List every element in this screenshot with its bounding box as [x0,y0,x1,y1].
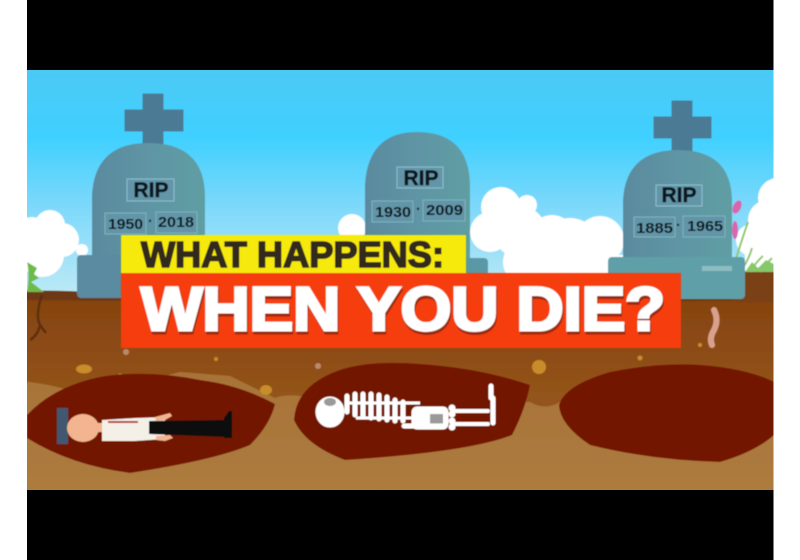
shirt [102,417,165,441]
hat [57,408,68,444]
years: 1930 [375,205,411,221]
clouds [27,178,774,278]
heading: when you die: WHEN YOU DIE? [141,275,665,343]
year plates [105,212,197,234]
sky [20,65,780,305]
title banner [121,234,681,348]
tombstone 3 [608,101,745,299]
year plates [634,216,725,237]
scene illustration [14,65,798,495]
worm [711,310,716,345]
year plates [372,200,465,222]
pit 3 empty [559,364,774,462]
cross [125,94,183,148]
yellow banner [121,235,466,274]
base [466,258,488,274]
base [608,257,745,299]
RIP label: RIP [661,184,697,207]
soil specks [118,343,702,376]
pit [27,374,275,473]
years [636,220,723,234]
years: 2009 [426,203,463,219]
years: 2018 [158,215,194,231]
hands [155,413,173,441]
soil stones [76,343,702,395]
ribs [345,394,425,421]
cloud: center [337,186,624,274]
tombstone 2 [365,132,488,278]
cross [654,101,711,154]
roots [30,295,46,340]
red banner [121,273,681,348]
years: · [416,202,421,218]
pit 1 with body [27,374,275,473]
topsoil strip [27,290,735,301]
years: 1965 [687,219,723,235]
stone left [76,364,92,374]
head [67,414,99,442]
knee and ankle joints [448,404,456,430]
flower [731,200,742,240]
pelvis detail [430,414,443,424]
stone near pit [260,385,272,395]
base [76,254,122,299]
pit [294,363,530,460]
shoes [224,411,232,438]
tie [108,421,138,423]
RIP plate [656,185,702,206]
pit 2 with skeleton [294,363,530,460]
stone body [92,143,205,262]
cloud: right [735,178,774,272]
years: 1950 [108,217,143,233]
pelvis [412,407,448,429]
skull [316,397,344,427]
tombstone 1 [77,94,207,298]
years [376,204,463,218]
black bar: bottom [27,490,774,560]
leg bones [404,411,488,426]
cloud: left [27,209,89,278]
neck [97,423,103,432]
light sand layer [20,372,780,495]
grass right [732,222,772,272]
years: · [676,218,681,234]
years: · [148,214,153,230]
soil [27,299,774,408]
base highlight [702,266,732,271]
black bar: top [27,0,774,70]
heading: when you die shadow: WHEN YOU DIE? [142,278,666,346]
RIP label: RIP [403,167,439,190]
skeleton [316,386,493,430]
heading: what happens: WHAT HAPPENS: [141,234,444,275]
years: 1885 [636,221,673,237]
years [108,216,194,230]
grass and flowers [27,199,774,292]
RIP plate [127,179,174,201]
RIP label: RIP [133,179,169,202]
RIP plate [397,167,443,188]
feet [491,386,493,423]
stone body [623,150,732,262]
trousers [149,420,226,437]
grass left [27,262,44,292]
stone center [532,360,546,374]
stone body [365,132,470,262]
